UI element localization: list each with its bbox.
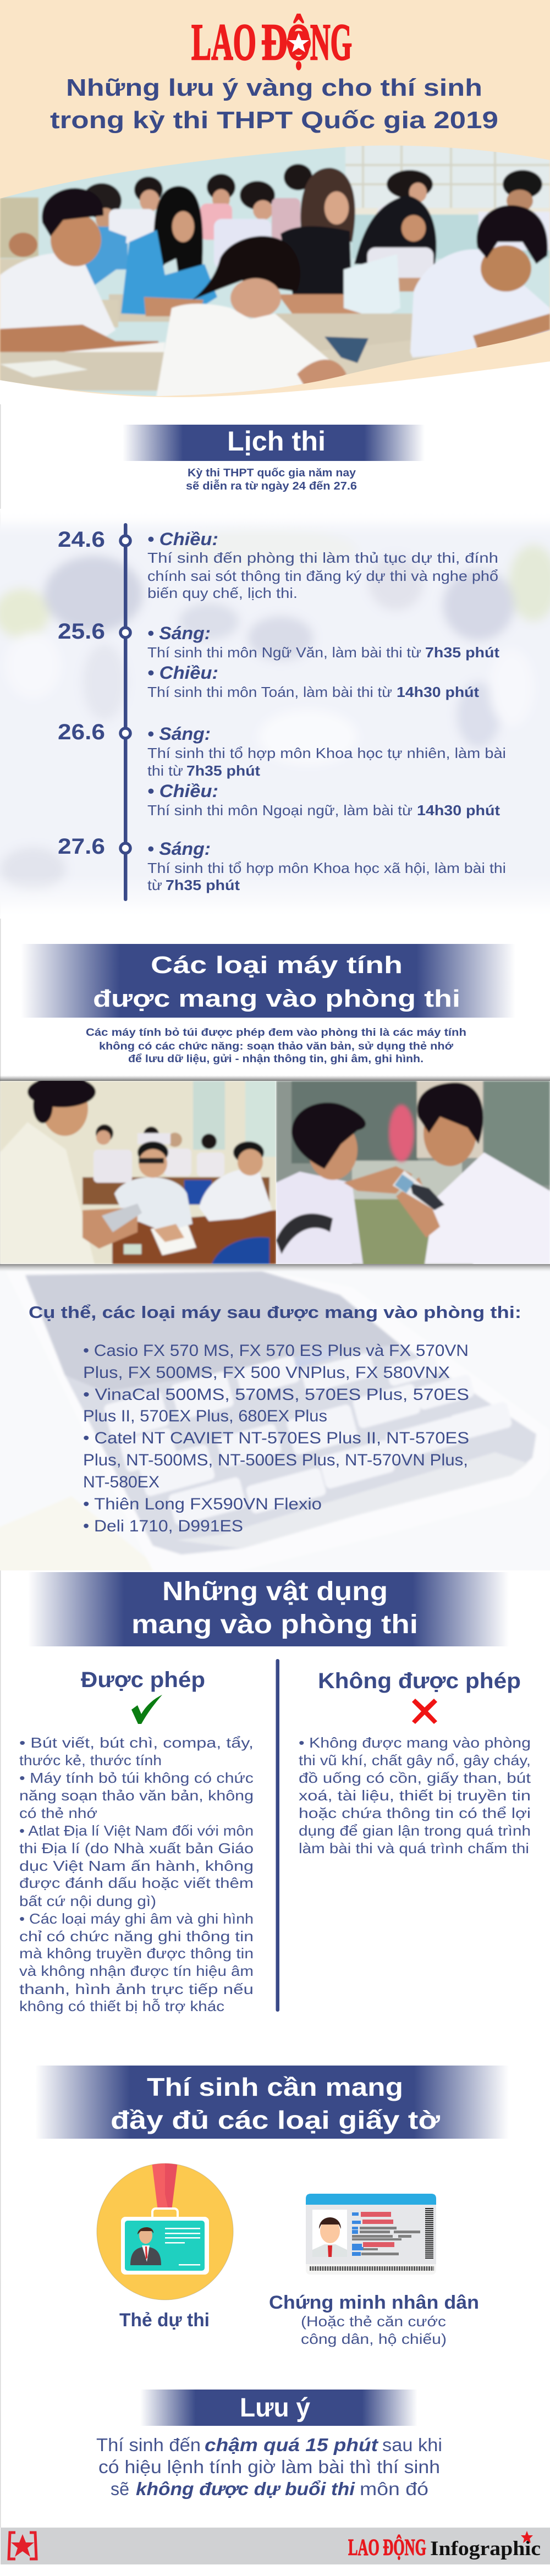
icon: red cross xyxy=(412,1699,437,1724)
allowed list: và không nhận được tín hiệu âm xyxy=(19,1963,254,1979)
icon: exam card badge xyxy=(97,2162,233,2300)
schedule 24.6 xyxy=(147,529,498,601)
title: trong kỳ thi THPT Quốc gia 2019 xyxy=(50,107,498,134)
allowed list: không có thiết bị hỗ trợ khác xyxy=(19,1998,224,2014)
not allowed list: đồ uống có cồn, giấy than, bút xyxy=(299,1770,531,1786)
note text: sau khi xyxy=(382,2435,442,2455)
allowed list: thi Địa lí (do Nhà xuất bản Giáo xyxy=(19,1840,254,1857)
note text: chậm quá 15 phút xyxy=(205,2435,379,2455)
schedule 26.6: • Chiều: xyxy=(147,781,218,801)
section: exam schedule background photo xyxy=(0,520,550,910)
timeline axis xyxy=(120,523,130,901)
header panel xyxy=(0,0,550,407)
logo: Lao Dong: NG xyxy=(310,14,352,71)
heading: note xyxy=(140,2390,417,2426)
schedule 26.6 xyxy=(147,724,506,819)
list of allowed calculators: NT-580EX xyxy=(83,1473,160,1491)
heading: note: Lưu ý xyxy=(240,2393,310,2423)
list of allowed calculators: • Catel NT CAVIET NT-570ES Plus II, NT-570ES xyxy=(83,1429,469,1447)
schedule 26.6: Thí sinh thi tổ hợp môn Khoa học tự nhiên, làm bài xyxy=(147,745,506,761)
ID card caption: công dân, hộ chiếu) xyxy=(301,2331,447,2347)
not allowed list: • Không được mang vào phòng xyxy=(299,1734,531,1751)
schedule 25.6: 14h30 phút xyxy=(397,684,479,700)
not allowed list: dụng để gian lận trong quá trình xyxy=(299,1822,531,1839)
schedule 26.6: • Sáng: xyxy=(147,724,211,744)
title xyxy=(50,74,498,134)
schedule intro: Kỳ thi THPT quốc gia năm nay xyxy=(188,467,356,479)
schedule 25.6: 7h35 phút xyxy=(425,644,499,661)
heading: Lich thi: Lịch thi xyxy=(227,426,326,457)
panel: allowed xyxy=(19,1668,254,2014)
header photo: students in exam room xyxy=(0,138,550,402)
heading: documents: Thí sinh cần mang xyxy=(147,2073,403,2101)
list of allowed calculators: Plus, FX 500MS, FX 500 VNPlus, FX 580VNX xyxy=(83,1364,450,1382)
calculators intro xyxy=(86,1027,466,1065)
exam card caption: Thẻ dự thi xyxy=(119,2310,210,2331)
schedule 25.6: • Chiều: xyxy=(147,663,218,683)
heading: documents: đầy đủ các loại giấy tờ xyxy=(111,2106,440,2134)
calculators intro: không có các chức năng: soạn thảo văn bản, sử dụng thẻ nhớ xyxy=(99,1041,454,1052)
schedule 24.6: biến quy chế, lịch thi. xyxy=(147,585,298,601)
icon: national ID card xyxy=(306,2194,436,2275)
schedule 24.6: Thí sinh đến phòng thi làm thủ tục dự thi, đính xyxy=(147,550,498,566)
schedule 26.6: Thí sinh thi môn Ngoại ngữ, làm bài từ xyxy=(147,802,413,819)
schedule 27.6 xyxy=(147,839,506,893)
heading: calculators xyxy=(21,944,515,1018)
schedule 25.6: Thí sinh thi môn Ngữ Văn, làm bài thi từ xyxy=(147,644,421,661)
not allowed list: làm bài thi và quá trình chấm thi xyxy=(299,1840,529,1857)
schedule 25.6 xyxy=(147,623,499,700)
logo: Lao Dong xyxy=(191,14,352,71)
photo: teacher checks calculator xyxy=(0,1076,276,1264)
not allowed list: xoá, tài liệu, thiết bị truyền tin xyxy=(299,1787,531,1804)
list of allowed calculators: • Casio FX 570 MS, FX 570 ES Plus và FX 570VN xyxy=(83,1342,469,1360)
schedule background bottom fade xyxy=(0,875,550,919)
footer bar xyxy=(1,2528,550,2564)
title: Những lưu ý vàng cho thí sinh xyxy=(66,74,482,101)
not allowed list xyxy=(299,1734,531,1857)
note text: sẽ xyxy=(111,2479,129,2499)
schedule intro xyxy=(186,467,357,492)
list of allowed calculators: • Thiên Long FX590VN Flexio xyxy=(83,1495,322,1513)
not allowed list: hoặc chứa thông tin có thể lợi xyxy=(299,1805,531,1821)
timeline dates: 25.6 xyxy=(58,619,105,644)
allowed list: • Máy tính bỏ túi không có chức xyxy=(19,1770,254,1786)
heading: items: mang vào phòng thi xyxy=(131,1610,418,1639)
schedule 25.6: Thí sinh thi môn Toán, làm bài thi từ xyxy=(147,684,392,700)
heading: calculators: Các loại máy tính xyxy=(151,952,403,979)
photo row xyxy=(0,1075,550,1272)
allowed list: thước kẻ, thước tính xyxy=(19,1752,162,1768)
allowed heading: Được phép xyxy=(81,1668,205,1692)
schedule 25.6: • Sáng: xyxy=(147,623,211,643)
allowed list: được đánh dấu hoặc viết thêm xyxy=(19,1875,254,1891)
timeline dates: 24.6 xyxy=(58,528,105,552)
allowed list: mà không truyền được thông tin xyxy=(19,1945,254,1962)
schedule intro: sẽ diễn ra từ ngày 24 đến 27.6 xyxy=(186,479,357,492)
allowed list: • Atlat Địa lí Việt Nam đối với môn xyxy=(19,1822,254,1839)
not allowed heading: Không được phép xyxy=(318,1669,521,1693)
note text: không được dự buổi thi xyxy=(136,2479,355,2499)
allowed list: thanh, hình ảnh trực tiếp nếu xyxy=(19,1981,254,1997)
note text: Thí sinh đến xyxy=(96,2435,201,2455)
list of allowed calculators: • VinaCal 500MS, 570MS, 570ES Plus, 570ES xyxy=(83,1386,469,1404)
schedule 24.6: chính sai sót thông tin đăng ký dự thi và nghe phổ xyxy=(147,568,498,584)
footer logo: LAO ĐỘNG xyxy=(348,2534,426,2561)
left page edge xyxy=(0,404,1,2528)
schedule 26.6: 7h35 phút xyxy=(186,762,260,779)
logo: Lao Dong: LAO xyxy=(191,14,256,71)
schedule 26.6: 14h30 phút xyxy=(417,802,500,819)
calculators intro: Các máy tính bỏ túi được phép đem vào phòng thi là các máy tính xyxy=(86,1027,466,1039)
ID card caption: Chứng minh nhân dân xyxy=(269,2292,479,2313)
note text xyxy=(96,2435,442,2499)
allowed list: • Các loại máy ghi âm và ghi hình xyxy=(19,1910,254,1927)
list of allowed calculators: • Deli 1710, D991ES xyxy=(83,1517,243,1535)
allowed list: có thẻ nhớ xyxy=(19,1805,97,1821)
list of allowed calculators xyxy=(83,1342,469,1535)
timeline dates: 27.6 xyxy=(58,834,105,859)
schedule 27.6: • Sáng: xyxy=(147,839,211,859)
divider between columns xyxy=(276,1659,279,2012)
schedule 26.6: thi từ xyxy=(147,762,183,779)
logo: Lao Dong: Ộ xyxy=(287,14,311,71)
ID card caption xyxy=(269,2292,479,2347)
schedule 27.6: 7h35 phút xyxy=(166,877,240,893)
calculator keypad background xyxy=(0,1260,550,1579)
calculators list heading: Cụ thể, các loại máy sau được mang vào phòng thi: xyxy=(29,1303,521,1322)
ID card caption: (Hoặc thẻ căn cước xyxy=(301,2313,446,2330)
heading: items: Những vật dụng xyxy=(162,1577,388,1606)
heading: items xyxy=(28,1572,509,1646)
allowed list: chỉ có chức năng ghi thông tin xyxy=(19,1928,254,1945)
heading: Lich thi xyxy=(123,425,425,461)
icon: green check xyxy=(131,1695,162,1724)
footer logo: Infographic xyxy=(430,2537,541,2560)
heading: calculators: được mang vào phòng thi xyxy=(93,985,460,1012)
list of allowed calculators: Plus, NT-500MS, NT-500ES Plus, NT-570VN Plus, xyxy=(83,1451,468,1469)
footer logo xyxy=(348,2531,541,2561)
list of allowed calculators: Plus II, 570EX Plus, 680EX Plus xyxy=(83,1407,327,1425)
allowed list: dục Việt Nam ấn hành, không xyxy=(19,1858,254,1874)
timeline dates: 26.6 xyxy=(58,720,105,744)
timeline dates xyxy=(58,528,105,859)
heading: documents xyxy=(35,2066,509,2139)
schedule 27.6: từ xyxy=(147,877,162,893)
note text: môn đó xyxy=(360,2479,428,2499)
allowed list: bất cứ nội dung gì) xyxy=(19,1893,156,1909)
logo: Lao Dong: Đ xyxy=(261,14,288,71)
note text: có hiệu lệnh tính giờ làm bài thì thí sinh xyxy=(98,2457,440,2477)
allowed list: năng soạn thảo văn bản, không xyxy=(19,1787,254,1804)
calculators intro: để lưu dữ liệu, gửi - nhận thông tin, ghi âm, ghi hình. xyxy=(128,1053,424,1065)
schedule background top fade xyxy=(0,509,550,536)
allowed list xyxy=(19,1734,254,2014)
icon: footer emblem xyxy=(9,2533,36,2559)
panel: not allowed xyxy=(299,1669,531,1857)
photo: students with calculator xyxy=(276,1081,550,1265)
schedule 27.6: Thí sinh thi tổ hợp môn Khoa học xã hội, làm bài thi xyxy=(147,860,506,876)
schedule 24.6: • Chiều: xyxy=(147,529,218,549)
allowed list: • Bút viết, bút chì, compa, tẩy, xyxy=(19,1734,254,1751)
not allowed list: thi vũ khí, chất gây nổ, gây cháy, xyxy=(299,1752,531,1768)
